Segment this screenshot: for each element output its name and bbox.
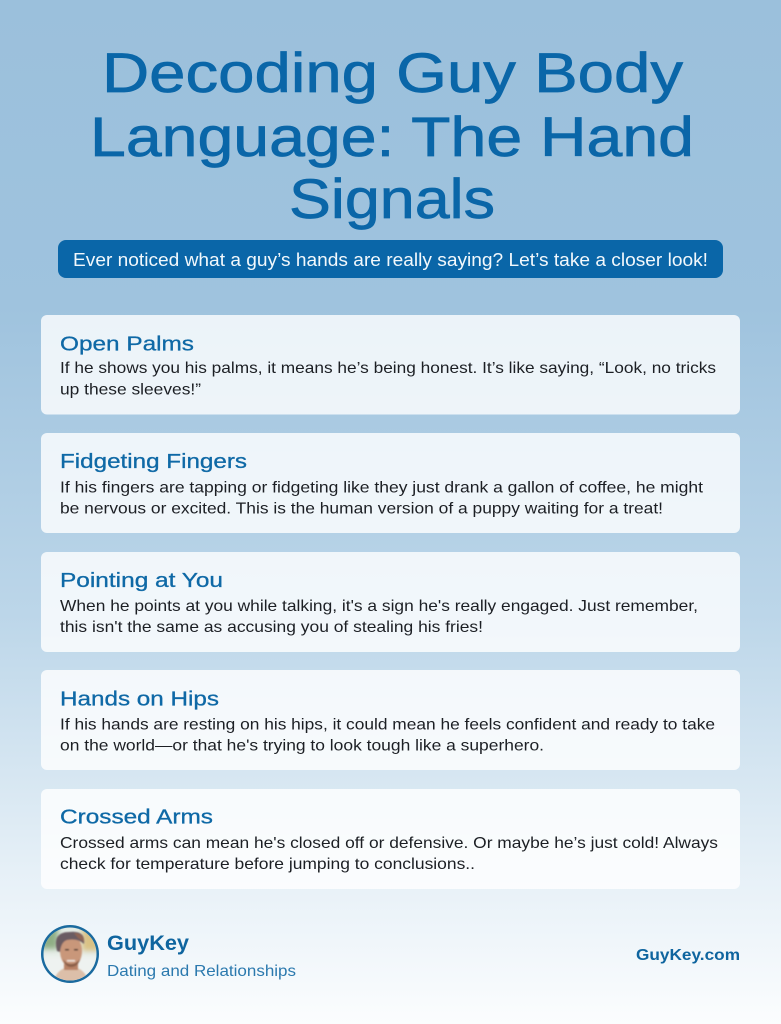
panel: pointing at you: Pointing at You xyxy=(60,569,223,592)
panel: fidgeting fingers: be nervous or excited. This is the human version of a puppy waiting for a treat! xyxy=(60,500,663,518)
panel: fidgeting fingers: Fidgeting Fingers xyxy=(60,450,247,473)
panel: pointing at you: this isn't the same as accusing you of stealing his fries! xyxy=(60,619,483,636)
subtitle banner: Ever noticed what a guy’s hands are really saying? Let’s take a closer look! xyxy=(73,249,708,270)
panel: hands on hips: If his hands are resting on his hips, it could mean he feels confident and ready to take xyxy=(60,716,715,734)
panel: fidgeting fingers: If his fingers are tapping or fidgeting like they just drank a gallon of coffee, he might xyxy=(60,480,704,496)
panel: open palms: up these sleeves!” xyxy=(60,382,201,398)
panel: crossed arms: Crossed arms can mean he's closed off or defensive. Or maybe he’s just cold! Always xyxy=(60,835,718,852)
panel: hands on hips: on the world—or that he's trying to look tough like a superhero. xyxy=(60,738,544,754)
brand name: GuyKey xyxy=(107,932,189,955)
panel: hands on hips xyxy=(41,670,740,770)
panel: pointing at you: When he points at you while talking, it's a sign he's really engaged. Just remember, xyxy=(60,598,698,615)
panel: hands on hips: Hands on Hips xyxy=(60,688,219,710)
panel: open palms xyxy=(41,315,740,414)
panel: crossed arms xyxy=(41,789,740,889)
panel: fidgeting fingers xyxy=(41,433,740,533)
panel: crossed arms: Crossed Arms xyxy=(60,806,213,828)
icon: author avatar xyxy=(40,925,100,983)
title: Language: The Hand xyxy=(90,105,694,168)
brand tagline: Dating and Relationships xyxy=(107,963,296,980)
website link: GuyKey.com xyxy=(636,947,740,964)
panel: crossed arms: check for temperature before jumping to conclusions.. xyxy=(60,856,475,873)
subtitle banner xyxy=(58,240,723,278)
panel: open palms: Open Palms xyxy=(60,332,194,356)
title xyxy=(90,41,694,230)
title: Signals xyxy=(289,167,495,230)
panel: pointing at you xyxy=(41,552,740,652)
panel: open palms: If he shows you his palms, it means he’s being honest. It’s like saying, “Look, no tricks xyxy=(60,360,716,377)
title: Decoding Guy Body xyxy=(102,41,683,104)
